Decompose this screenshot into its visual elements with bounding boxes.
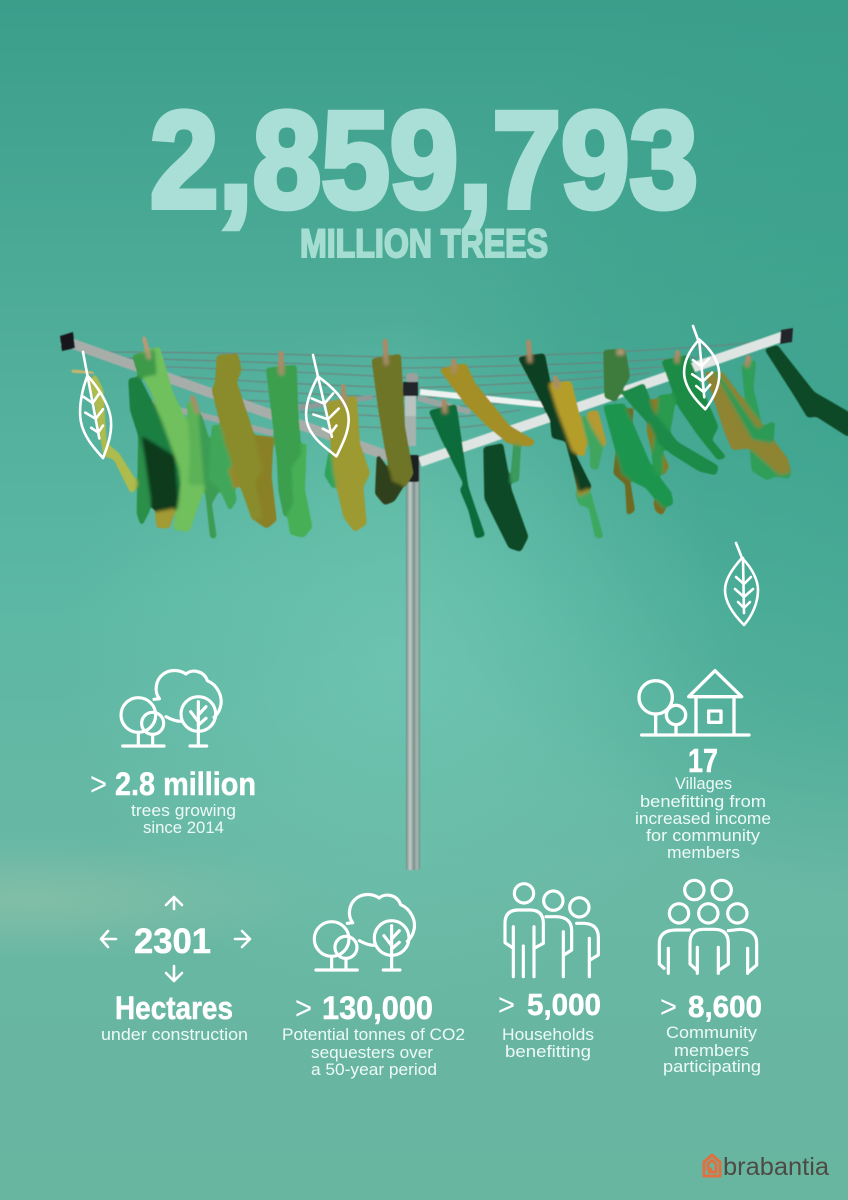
caption: trees growing (131, 801, 236, 820)
caption (131, 801, 236, 837)
stat: 2.8 million trees (90, 670, 256, 837)
icon: leaf on left sock (68, 349, 118, 461)
caption: increased income (635, 809, 771, 828)
caption: benefitting from (640, 792, 766, 811)
icon: four arrows (101, 897, 250, 981)
icon: falling leaf (725, 543, 758, 625)
caption: Households (502, 1025, 594, 1044)
logo: brabantia (704, 1153, 829, 1181)
value (498, 987, 601, 1022)
icon: orange house (704, 1155, 720, 1176)
caption (663, 1023, 761, 1076)
value: 17 (688, 742, 718, 779)
stat: 2301 hectares (101, 897, 250, 1044)
icon: five people (659, 880, 757, 973)
caption: Potential tonnes of CO2 (282, 1025, 465, 1044)
caption (635, 774, 771, 862)
icon: house and trees (639, 671, 749, 735)
value: 5,000 (527, 987, 601, 1022)
caption: since 2014 (143, 818, 224, 837)
stat: 130,000 tonnes of CO2 (282, 894, 465, 1079)
caption: Villages (675, 774, 732, 793)
wordmark: brabantia (723, 1153, 829, 1181)
icon: trees (314, 894, 414, 970)
subtitle: million trees: MILLION TREES (300, 222, 548, 266)
value: 2301 (134, 922, 211, 961)
airer pole (406, 455, 420, 870)
unit: Hectares (115, 990, 233, 1026)
icon: leaf on right sock (680, 324, 722, 411)
caption: participating (663, 1057, 761, 1076)
caption: Community (666, 1023, 758, 1042)
caption: benefitting (505, 1042, 591, 1061)
value: 2.8 million (115, 766, 256, 802)
value: 8,600 (688, 989, 762, 1024)
icon: trees (121, 670, 221, 746)
caption: members (667, 843, 740, 862)
stat: 5,000 households (498, 884, 601, 1061)
airer arms (60, 328, 793, 462)
caption: a 50-year period (311, 1060, 437, 1079)
icon: leaf on middle sock (293, 350, 357, 461)
caption: members (674, 1041, 749, 1060)
icon: three people (505, 884, 598, 977)
value: > (498, 987, 515, 1022)
value: > (295, 990, 312, 1026)
caption: sequesters over (311, 1043, 433, 1062)
value: > (660, 989, 677, 1024)
caption (282, 1025, 465, 1079)
socks on the right side (431, 339, 848, 550)
value: > (90, 766, 107, 802)
caption: under construction (101, 1025, 248, 1044)
photo: rotary clothes airer with green socks (60, 328, 848, 870)
stat: 17 villages (635, 671, 771, 862)
caption (502, 1025, 594, 1061)
caption: for community (646, 826, 761, 845)
airer hub (403, 373, 419, 482)
title: big number: 2,859,793 (150, 84, 698, 237)
stat: 8,600 community members (659, 880, 762, 1076)
value: 130,000 (322, 990, 433, 1026)
socks on the left side (71, 336, 412, 537)
airer wires (83, 342, 760, 428)
